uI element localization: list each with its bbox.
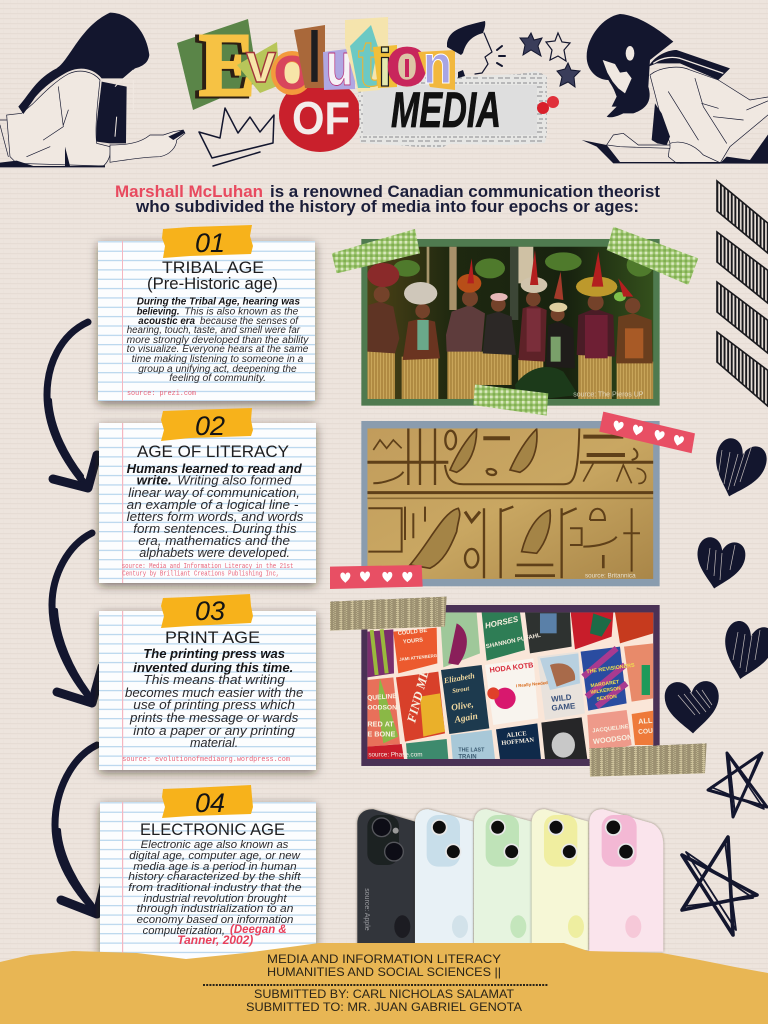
number tape 04: 04	[195, 788, 225, 818]
green phone	[474, 809, 532, 950]
arrow: from tribal age to literacy	[47, 322, 97, 488]
submission lines: SUBMITTED TO: MR. JUAN GABRIEL GENOTA	[246, 1000, 522, 1014]
body text: alphabets were developed.	[139, 546, 290, 560]
foreground plant	[515, 367, 578, 399]
body text: because the senses of	[200, 316, 299, 327]
icon: striped chevrons	[717, 181, 768, 408]
book titles: E BONE	[367, 730, 396, 739]
body text: history characterized by the shift	[128, 871, 302, 883]
book titles: OODSON	[367, 704, 397, 711]
body text: media age is a period in human	[133, 861, 297, 873]
book titles: COULD BE	[398, 628, 428, 637]
icon: crown doodle	[199, 108, 274, 166]
subtitle: intro text: who subdivided the history of media into four epochs or ages:	[135, 197, 639, 216]
blue phone	[415, 809, 473, 950]
MEDIA torn newspaper panel: MEDIA	[391, 82, 501, 138]
subject lines: MEDIA AND INFORMATION LITERACY	[267, 952, 501, 966]
red push pins	[537, 96, 559, 114]
cut-out paper: green behind E	[177, 19, 258, 110]
body text	[127, 296, 309, 384]
body text: to visualize. Everyone hears at the same	[127, 344, 309, 355]
book titles: HORSES	[484, 614, 520, 630]
yellow phone	[532, 809, 588, 950]
book titles: ALL	[638, 716, 653, 726]
body text: material.	[190, 735, 238, 750]
photo source: source: Phase.com	[368, 752, 423, 759]
book titles: SHANNON PUFAHL	[485, 633, 542, 650]
subtitle: intro text: Marshall McLuhan	[115, 182, 263, 201]
icon: talking head	[447, 21, 505, 78]
body text: computerization,	[143, 925, 225, 937]
letter l: l	[308, 19, 321, 98]
MEDIA torn newspaper panel	[358, 71, 547, 148]
submission lines	[246, 987, 522, 1014]
headdresses	[367, 250, 633, 312]
green gingham tapes	[332, 227, 698, 416]
heading: ELECTRONIC AGE	[140, 820, 285, 839]
torsos	[367, 302, 653, 368]
body text: an example of a logical line -	[127, 498, 298, 512]
body text: digital age, computer age, or new	[129, 850, 301, 862]
book titles: RED AT	[367, 720, 394, 729]
body text: letters form words, and words	[127, 510, 303, 524]
book titles: WILD	[551, 693, 572, 704]
paper card	[99, 611, 316, 770]
title: Evolution of Media	[177, 16, 559, 152]
newspaper tapes on books photo	[330, 597, 707, 777]
green frame	[361, 239, 660, 406]
body text: The printing press was	[143, 646, 285, 661]
book titles: FIND ME	[404, 668, 432, 725]
paper card	[98, 241, 315, 401]
body text: Tanner, 2002)	[177, 935, 253, 947]
photo source: source: Britannica	[585, 572, 636, 579]
body text: feeling of community.	[169, 373, 266, 384]
arrow: from literacy to print	[52, 533, 102, 703]
panel: electronic age note	[100, 785, 316, 960]
book titles: WOODSON	[593, 732, 633, 746]
source	[122, 563, 293, 578]
book titles: GAME	[551, 701, 576, 713]
footer: torn yellow paper with credits	[0, 943, 768, 1024]
book titles: QUELINE	[367, 693, 398, 702]
heading	[147, 258, 278, 293]
book titles: THE LAST	[458, 748, 485, 754]
book titles: MARGARET	[590, 679, 620, 689]
book titles: HODA KOTB	[489, 660, 534, 675]
photo: tribal people	[361, 239, 660, 406]
image: row of coloured phones	[357, 809, 663, 952]
book titles: JACQUELINE	[592, 724, 629, 735]
body text: era, mathematics and the	[138, 534, 290, 548]
body text: Humans learned to read and	[127, 462, 302, 476]
body text: into a paper or any printing	[133, 723, 296, 738]
body text: invented during this time.	[133, 660, 293, 675]
book titles: HOFFMAN	[501, 737, 535, 747]
icon: scribbled stars	[682, 753, 767, 935]
source: source: evolutionofmediaorg.wordpress.com	[122, 756, 290, 764]
letter l	[294, 19, 325, 98]
letter o: o	[385, 22, 429, 102]
dotted divider	[203, 984, 548, 986]
body text	[128, 839, 302, 947]
body text: acoustic era	[138, 316, 195, 327]
OF red circle	[279, 78, 361, 152]
body text: Electronic age also known as	[141, 839, 289, 851]
OF red circle: OF	[292, 92, 350, 144]
letter E: E	[199, 16, 255, 115]
pink phone	[589, 809, 663, 952]
source: Century by Brilliant Creations Publishing Inc,	[122, 570, 279, 578]
letter E: E	[196, 17, 252, 116]
book titles: TRAIN	[458, 754, 477, 760]
red heart tapes	[330, 412, 695, 589]
body text: economy based on information	[137, 914, 293, 926]
paper card	[99, 423, 316, 583]
source: source: prezi.com	[127, 390, 196, 398]
photo source: source: The Pieros UP	[573, 391, 644, 398]
illustration: girl on phone, right	[582, 14, 768, 164]
letter i: i	[378, 38, 392, 98]
heading: AGE OF LITERACY	[137, 442, 289, 461]
body text: becomes much easier with the	[125, 685, 303, 700]
arrow: from print to electronic	[55, 745, 106, 914]
body text: use of printing press which	[133, 697, 295, 712]
forest and group of people	[367, 247, 653, 399]
icon: scribbled hearts	[664, 435, 768, 734]
panel: age of literacy note	[99, 408, 316, 583]
submission lines: SUBMITTED BY: CARL NICHOLAS SALAMAT	[254, 987, 515, 1001]
book titles: I Really Needed	[516, 680, 548, 688]
letter t: t	[358, 26, 378, 100]
falcon carvings	[410, 429, 550, 568]
heading: PRINT AGE	[165, 628, 260, 647]
heads	[374, 286, 640, 321]
book titles: THE REVISIONERS	[586, 663, 635, 675]
book titles: Again	[453, 712, 479, 726]
number tape 04	[162, 785, 253, 818]
body text: through industrialization to an	[137, 903, 293, 915]
body text: This means that writing	[143, 672, 286, 687]
subject lines	[267, 952, 501, 979]
body text: hearing, touch, taste, and smell were far	[127, 325, 301, 336]
beadwork	[417, 308, 643, 362]
body text	[127, 462, 303, 560]
panel: tribal age note	[98, 225, 315, 401]
book titles: Elizabeth	[442, 671, 476, 686]
letter u: u	[326, 31, 353, 98]
body text: During the Tribal Age, hearing was	[137, 296, 300, 308]
paper card	[100, 802, 316, 960]
slate frame	[361, 421, 660, 586]
carved stone wall	[367, 428, 653, 579]
letter v: v	[246, 31, 276, 94]
subject lines: HUMANITIES AND SOCIAL SCIENCES ||	[267, 965, 501, 979]
raffia skirts	[367, 350, 653, 399]
body text: write.	[137, 474, 172, 488]
purple frame	[361, 605, 660, 766]
book titles: WILKERSON	[590, 686, 622, 696]
number tape 02	[161, 408, 253, 441]
body text: time making listening to someone in a	[132, 354, 304, 365]
book titles: Strout	[452, 685, 471, 695]
body text: believing.	[137, 306, 179, 318]
book titles: SEXTON	[596, 694, 618, 703]
body text	[125, 646, 303, 750]
photo: book covers	[361, 605, 660, 766]
body text: linear way of communication,	[128, 486, 300, 500]
body text: from traditional industry that the	[128, 882, 302, 894]
body text: (Deegan &	[230, 924, 287, 936]
number tape 03	[161, 594, 253, 628]
body text: Writing also formed	[177, 474, 293, 488]
source: source: Media and Information Literacy in the 21st	[122, 563, 293, 571]
body text: group a unifying act, deepening the	[138, 364, 297, 375]
letter i	[373, 38, 397, 98]
black phone	[357, 809, 415, 950]
number tape 01: 01	[195, 228, 225, 258]
photo: egyptian hieroglyphs	[361, 421, 660, 586]
body text: This is also known as the	[184, 306, 299, 318]
body text: prints the message or wards	[129, 710, 299, 725]
book titles: ALICE	[506, 730, 527, 739]
letter t	[345, 17, 388, 100]
subtitle: intro text	[115, 182, 660, 216]
subtitle: intro text: is a renowned Canadian communication theorist	[270, 182, 660, 201]
book titles: JAMI ATTENBERG	[399, 653, 438, 662]
torn paper	[0, 943, 768, 1024]
number tape 03: 03	[195, 596, 225, 626]
heading: (Pre-Historic age)	[147, 274, 278, 293]
heading: TRIBAL AGE	[162, 258, 264, 277]
number tape 02: 02	[195, 411, 225, 441]
book titles	[367, 614, 653, 760]
letter o: o	[273, 34, 311, 103]
book titles: Olive,	[451, 700, 474, 714]
body text: more strongly developed than the ability	[127, 335, 309, 346]
body text: industrial revolution brought	[143, 893, 288, 905]
black phone: source: Apple	[363, 888, 370, 931]
panel: print age note	[99, 594, 316, 770]
illustration: girl on phone, left	[0, 13, 185, 167]
number tape 01	[162, 225, 253, 258]
icon: small stars	[520, 33, 580, 87]
washi tapes on photos	[330, 227, 698, 589]
letter n: n	[423, 35, 452, 95]
body text: form sentences. During this	[133, 522, 297, 536]
book titles: COU	[638, 728, 653, 736]
book titles: YOURS	[403, 637, 424, 646]
tilted grid of book covers	[367, 612, 653, 760]
